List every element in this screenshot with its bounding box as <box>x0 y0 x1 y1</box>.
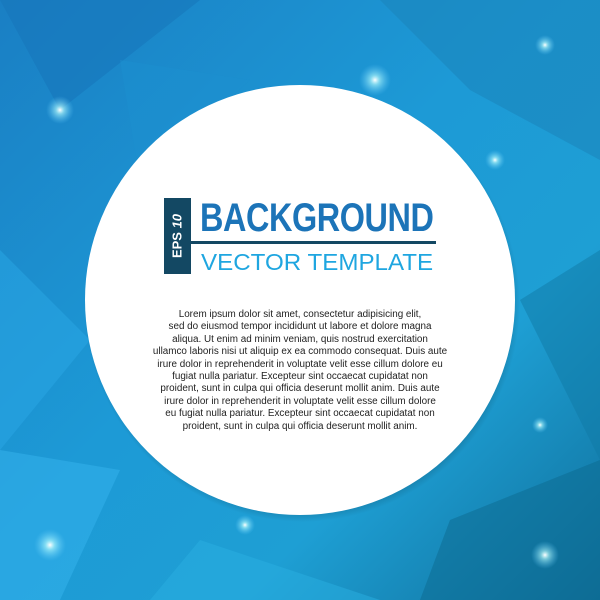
EPS 10 badge <box>164 198 191 274</box>
body text: eu fugiat nulla pariatur. Excepteur sint occaecat cupidatat non <box>165 408 435 419</box>
body text: ullamco laboris nisi ut aliquip ex ea commodo consequat. Duis aute <box>153 346 447 357</box>
subtitle: VECTOR TEMPLATE <box>201 249 433 275</box>
body text: fugiat nulla pariatur. Excepteur sint occaecat cupidatat non <box>172 371 428 382</box>
white circle <box>85 85 515 515</box>
body text: irure dolor in reprehenderit in voluptate velit esse cillum dolore <box>164 396 436 407</box>
body text <box>153 309 447 432</box>
body text: Lorem ipsum dolor sit amet, consectetur adipisicing elit, <box>179 309 421 320</box>
body text: aliqua. Ut enim ad minim veniam, quis nostrud exercitation <box>172 334 428 345</box>
body text: proident, sunt in culpa qui officia deserunt mollit anim. Duis aute <box>160 383 440 394</box>
body text: sed do eiusmod tempor incididunt ut labore et dolore magna <box>169 321 431 332</box>
EPS 10 badge: EPS 10 <box>170 214 184 258</box>
body text: irure dolor in reprehenderit in voluptate velit esse cillum dolore eu <box>157 359 443 370</box>
body text: proident, sunt in culpa qui officia deserunt mollit anim. <box>183 421 417 432</box>
title BACKGROUND: BACKGROUND <box>200 196 434 240</box>
divider rule <box>191 241 436 244</box>
heading block <box>164 196 436 275</box>
